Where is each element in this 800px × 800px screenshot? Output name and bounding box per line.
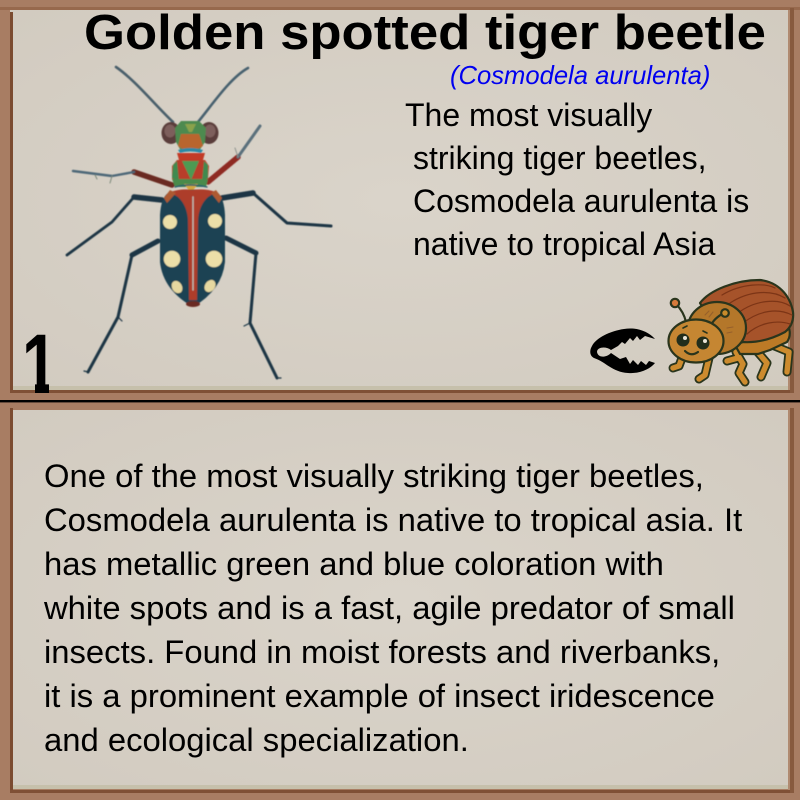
divider line (0, 400, 800, 402)
body paragraph: insects. Found in moist forests and riverbanks, (44, 633, 720, 670)
body paragraph: Cosmodela aurulenta is native to tropical asia. It (44, 501, 742, 538)
icon: cartoon beetle (668, 280, 793, 382)
short description (405, 97, 749, 262)
short description: Cosmodela aurulenta is (413, 183, 749, 219)
body (160, 121, 225, 307)
body paragraph: One of the most visually striking tiger beetles, (44, 457, 704, 494)
pronotum (172, 160, 209, 184)
cartoon shell (700, 280, 793, 342)
panel: bottom card (0, 402, 800, 800)
body paragraph: and ecological specialization. (44, 721, 469, 758)
cartoon head (668, 320, 724, 362)
short description: The most visually (405, 97, 652, 133)
cartoon underbody (735, 325, 790, 354)
short description: native to tropical Asia (413, 226, 716, 262)
body paragraph: it is a prominent example of insect iridescence (44, 677, 715, 714)
body paragraph (43, 457, 742, 758)
icon: mandibles (590, 328, 655, 373)
short description: striking tiger beetles, (413, 140, 706, 176)
elytra (160, 190, 225, 307)
legs (67, 126, 331, 378)
scientific name: (Cosmodela aurulenta) (450, 62, 710, 90)
body paragraph: white spots and is a fast, agile predator of small (43, 589, 735, 626)
eyes (162, 122, 180, 144)
cartoon legs (673, 345, 789, 382)
neck (178, 148, 203, 153)
illustration: tiger beetle (67, 67, 331, 378)
antennae (116, 67, 248, 122)
card number: 1 (22, 317, 57, 411)
cartoon thorax (688, 302, 746, 354)
title: Golden spotted tiger beetle (84, 6, 766, 60)
cartoon antennae (676, 304, 724, 327)
panel: top card (0, 0, 800, 400)
head (175, 121, 206, 151)
body paragraph: has metallic green and blue coloration with (44, 545, 664, 582)
spots (163, 215, 177, 229)
